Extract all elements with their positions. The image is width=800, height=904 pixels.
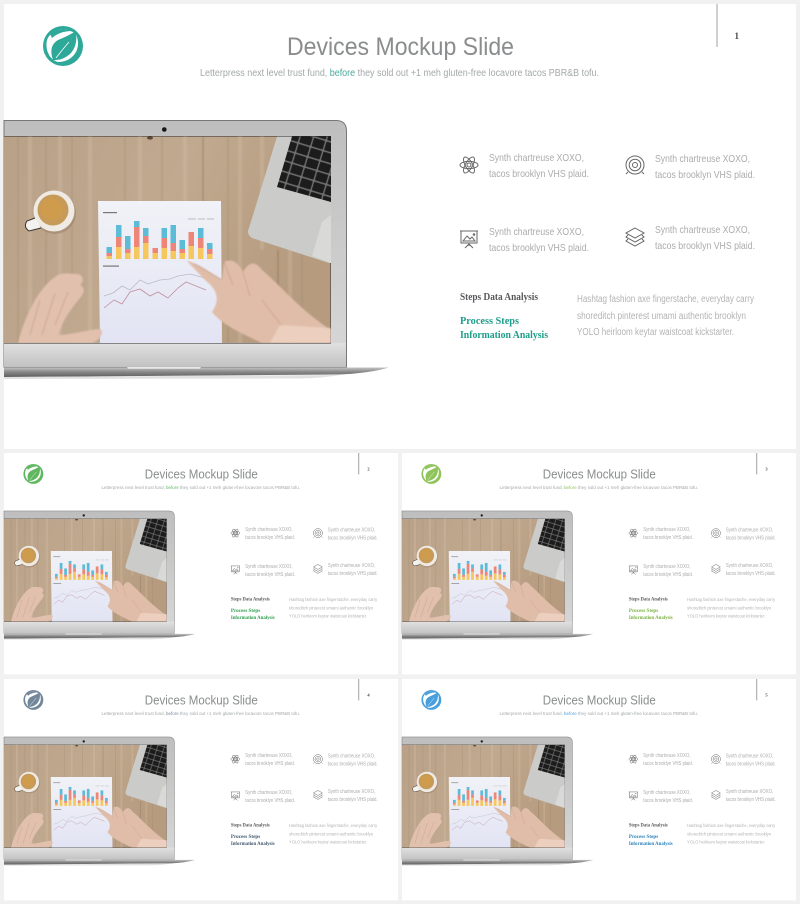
process steps labels: Process Steps — [629, 608, 658, 614]
feature text: Synth chartreuse XOXO, — [726, 528, 773, 534]
feature text: Synth chartreuse XOXO, — [245, 790, 293, 796]
steps heading: Steps Data Analysis — [231, 823, 270, 828]
page divider — [755, 453, 758, 474]
icon: atom — [629, 754, 638, 764]
process steps labels: Information Analysis — [629, 615, 673, 621]
feature 2 text: tacos brooklyn VHS plaid. — [655, 169, 755, 181]
feature text: Synth chartreuse XOXO, — [328, 528, 375, 534]
feature 1 text: Synth chartreuse XOXO, — [489, 152, 584, 164]
page number: 2 — [367, 466, 370, 471]
icon: board — [231, 566, 240, 574]
logo: lime leaf — [421, 464, 441, 484]
feature 1 text: tacos brooklyn VHS plaid. — [489, 168, 589, 180]
description paragraph: shoreditch pinterest umami authentic brooklyn — [687, 606, 771, 612]
description paragraph: shoreditch pinterest umami authentic brooklyn — [289, 606, 373, 612]
slide 2: green variant — [4, 453, 398, 674]
description paragraph: Hashtag fashion axe fingerstache, everyday carry — [577, 294, 754, 305]
title: Devices Mockup Slide — [287, 33, 514, 61]
feature text: Synth chartreuse XOXO, — [643, 527, 691, 533]
icon: board — [629, 792, 638, 800]
icon: atom — [629, 528, 638, 538]
description paragraph: Hashtag fashion axe fingerstache, everyday carry — [687, 823, 776, 829]
feature text: Synth chartreuse XOXO, — [726, 754, 773, 760]
process steps labels: Information Analysis — [629, 841, 673, 847]
laptop mockup — [402, 511, 594, 640]
icon: atom — [231, 528, 240, 538]
description paragraph: YOLO heirloom keytar waistcoat kickstarter. — [577, 327, 734, 338]
feature text: tacos brooklyn VHS plaid. — [328, 797, 378, 803]
icon: target — [711, 529, 720, 538]
page number: 4 — [367, 692, 370, 697]
feature text: Synth chartreuse XOXO, — [245, 527, 293, 533]
feature text: Synth chartreuse XOXO, — [726, 789, 773, 795]
process steps labels: Process Steps — [460, 316, 519, 327]
feature text: tacos brooklyn VHS plaid. — [245, 761, 295, 767]
feature text: Synth chartreuse XOXO, — [643, 790, 691, 796]
description paragraph: YOLO heirloom keytar waistcoat kickstarter. — [687, 614, 765, 620]
feature text: tacos brooklyn VHS plaid. — [643, 761, 693, 767]
icon: layers — [313, 790, 322, 799]
page divider — [755, 679, 758, 700]
laptop mockup — [4, 737, 196, 866]
feature text: tacos brooklyn VHS plaid. — [328, 571, 378, 577]
description paragraph: Hashtag fashion axe fingerstache, everyday carry — [687, 597, 776, 603]
subtitle: Letterpress next level trust fund, before they sold out +1 meh gluten-free locavore tacos PBR&B tofu. — [500, 711, 698, 717]
steps heading: Steps Data Analysis — [629, 823, 668, 828]
feature text: tacos brooklyn VHS plaid. — [726, 762, 776, 768]
subtitle: Letterpress next level trust fund, before they sold out +1 meh gluten-free locavore tacos PBR&B tofu. — [102, 711, 300, 717]
steps heading: Steps Data Analysis — [629, 597, 668, 602]
logo: green leaf — [23, 464, 43, 484]
icon: layers — [711, 790, 720, 799]
feature text: tacos brooklyn VHS plaid. — [328, 762, 378, 768]
feature text: tacos brooklyn VHS plaid. — [245, 572, 295, 578]
slide 5: blue variant — [402, 679, 796, 900]
process steps labels: Information Analysis — [460, 330, 548, 341]
slide 3: lime variant — [402, 453, 796, 674]
process steps labels: Information Analysis — [231, 841, 275, 847]
steps heading: Steps Data Analysis — [460, 292, 538, 303]
feature 1 icon: atom — [460, 155, 478, 175]
feature 4 text: Synth chartreuse XOXO, — [655, 224, 750, 236]
slide 4: slate variant — [4, 679, 398, 900]
icon: atom — [231, 754, 240, 764]
icon: target — [313, 755, 322, 764]
description paragraph: shoreditch pinterest umami authentic brooklyn — [289, 832, 373, 838]
description paragraph: YOLO heirloom keytar waistcoat kickstarter. — [289, 840, 367, 846]
logo: slate leaf — [23, 690, 43, 710]
feature text: tacos brooklyn VHS plaid. — [328, 536, 378, 542]
icon: target — [711, 755, 720, 764]
steps heading: Steps Data Analysis — [231, 597, 270, 602]
icon: board — [629, 566, 638, 574]
title: Devices Mockup Slide — [543, 693, 656, 707]
title: Devices Mockup Slide — [145, 467, 258, 481]
laptop mockup — [4, 511, 196, 640]
feature text: Synth chartreuse XOXO, — [245, 753, 293, 759]
feature 3 text: tacos brooklyn VHS plaid. — [489, 242, 589, 254]
description paragraph: Hashtag fashion axe fingerstache, everyday carry — [289, 597, 378, 603]
feature text: Synth chartreuse XOXO, — [328, 789, 375, 795]
title: Devices Mockup Slide — [145, 693, 258, 707]
feature text: tacos brooklyn VHS plaid. — [726, 536, 776, 542]
feature text: tacos brooklyn VHS plaid. — [245, 535, 295, 541]
feature text: Synth chartreuse XOXO, — [328, 754, 375, 760]
description paragraph: shoreditch pinterest umami authentic brooklyn — [687, 832, 771, 838]
logo: teal leaf — [43, 26, 83, 66]
feature text: tacos brooklyn VHS plaid. — [643, 572, 693, 578]
feature text: tacos brooklyn VHS plaid. — [726, 797, 776, 803]
feature 2 icon: target — [626, 156, 644, 174]
process steps labels: Process Steps — [231, 608, 260, 614]
icon: board — [231, 792, 240, 800]
feature text: Synth chartreuse XOXO, — [643, 564, 691, 570]
feature text: tacos brooklyn VHS plaid. — [643, 798, 693, 804]
feature text: tacos brooklyn VHS plaid. — [643, 535, 693, 541]
icon: layers — [711, 564, 720, 573]
icon: layers — [313, 564, 322, 573]
feature text: tacos brooklyn VHS plaid. — [726, 571, 776, 577]
process steps labels: Process Steps — [629, 834, 658, 840]
laptop mockup — [402, 737, 594, 866]
subtitle: Letterpress next level trust fund, before they sold out +1 meh gluten-free locavore tacos PBR&B tofu. — [500, 485, 698, 491]
laptop mockup with desk photo — [4, 120, 389, 379]
page number: 1 — [734, 31, 740, 41]
feature 4 icon: layers — [626, 228, 644, 246]
title: Devices Mockup Slide — [543, 467, 656, 481]
feature text: Synth chartreuse XOXO, — [328, 563, 375, 569]
page number: 5 — [765, 692, 768, 697]
page divider — [716, 4, 718, 47]
feature 2 text: Synth chartreuse XOXO, — [655, 153, 750, 165]
subtitle: Letterpress next level trust fund, before they sold out +1 meh gluten-free locavore tacos PBR&B tofu. — [200, 68, 599, 79]
description paragraph: YOLO heirloom keytar waistcoat kickstarter. — [289, 614, 367, 620]
feature text: Synth chartreuse XOXO, — [245, 564, 293, 570]
feature text: tacos brooklyn VHS plaid. — [245, 798, 295, 804]
feature 4 text: tacos brooklyn VHS plaid. — [655, 240, 755, 252]
page divider — [357, 679, 360, 700]
process steps labels: Information Analysis — [231, 615, 275, 621]
icon: target — [313, 529, 322, 538]
slide 1: main teal slide — [4, 4, 796, 449]
subtitle: Letterpress next level trust fund, before they sold out +1 meh gluten-free locavore tacos PBR&B tofu. — [102, 485, 300, 491]
logo: blue leaf — [421, 690, 441, 710]
description paragraph: shoreditch pinterest umami authentic brooklyn — [577, 311, 746, 322]
page number: 3 — [765, 466, 768, 471]
feature 3 icon: presentation board — [460, 231, 478, 248]
feature 3 text: Synth chartreuse XOXO, — [489, 226, 584, 238]
process steps labels: Process Steps — [231, 834, 260, 840]
description paragraph: YOLO heirloom keytar waistcoat kickstarter. — [687, 840, 765, 846]
feature text: Synth chartreuse XOXO, — [726, 563, 773, 569]
page divider — [357, 453, 360, 474]
description paragraph: Hashtag fashion axe fingerstache, everyday carry — [289, 823, 378, 829]
feature text: Synth chartreuse XOXO, — [643, 753, 691, 759]
